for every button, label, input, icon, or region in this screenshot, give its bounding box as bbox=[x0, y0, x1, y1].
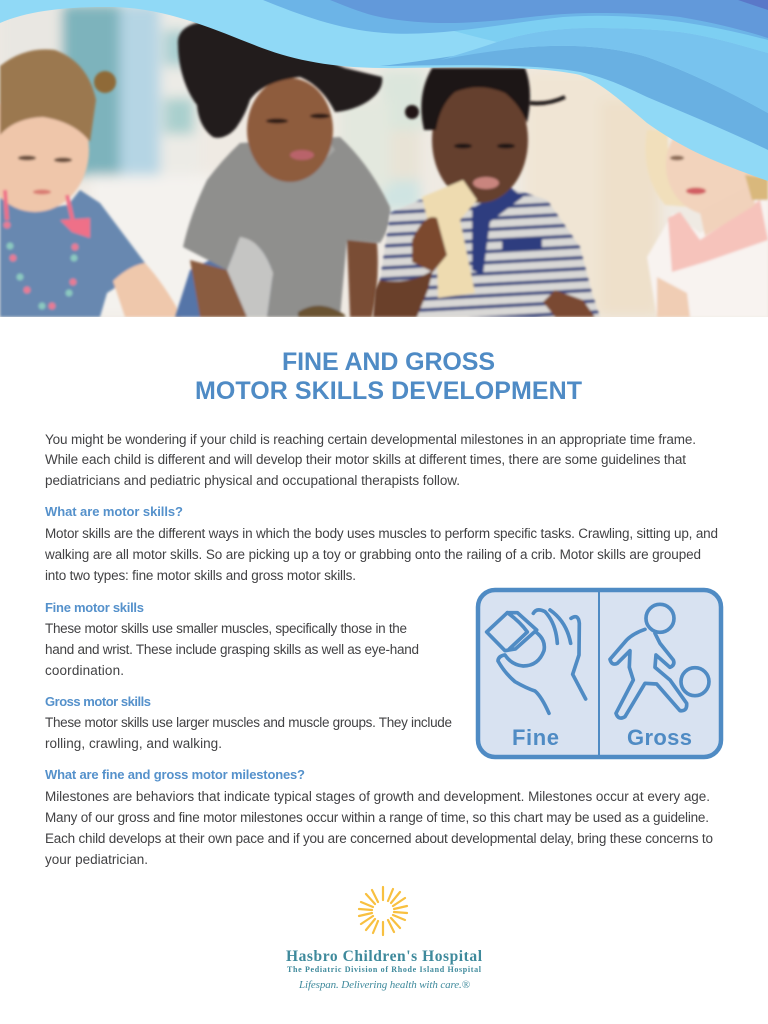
section: what are motor skills bbox=[44, 504, 718, 583]
wave banner bbox=[0, 0, 768, 181]
wave: sky blue band bbox=[440, 28, 768, 113]
wave: upper blue band bbox=[263, 0, 768, 40]
intro paragraph bbox=[45, 432, 696, 488]
intro paragraph: You might be wondering if your child is reaching certain developmental milestones in an appropriate time frame. bbox=[45, 432, 696, 447]
logo: Hasbro Children's Hospital bbox=[286, 887, 483, 991]
text: fine motor skills description: These motor skills use smaller muscles, specifically those in the bbox=[45, 621, 407, 636]
text: motor skills definition bbox=[44, 526, 718, 583]
text: milestones description: Each child develops at their own pace and if you are concerned about developmental delay, bring these concerns to bbox=[45, 831, 713, 846]
wave: pale streak bbox=[450, 13, 768, 53]
heading: gross motor skills: Gross motor skills bbox=[45, 694, 151, 709]
section: milestones bbox=[45, 767, 713, 867]
text: motor skills definition: Motor skills are the different ways in which the body uses muscles to perform specific tasks. Crawling, sitting up, and bbox=[45, 526, 718, 541]
wave: darkest corner bbox=[738, 0, 768, 10]
text: fine motor skills description bbox=[45, 621, 419, 678]
fine and gross icon panel bbox=[478, 590, 721, 757]
section: gross motor skills bbox=[45, 694, 452, 751]
text: hospital name: Hasbro Children's Hospital bbox=[286, 948, 483, 965]
wave: light base band bbox=[0, 0, 768, 181]
text: milestones description bbox=[45, 789, 713, 867]
text: milestones description: your pediatrician. bbox=[45, 852, 148, 867]
title: FINE AND GROSS bbox=[282, 348, 495, 376]
intro paragraph: pediatricians and pediatric physical and occupational therapists follow. bbox=[45, 473, 460, 488]
title bbox=[195, 348, 582, 405]
section: fine motor skills bbox=[45, 600, 419, 678]
heading: fine motor skills: Fine motor skills bbox=[45, 600, 144, 615]
icon: sun bbox=[359, 887, 407, 935]
text: tagline: Lifespan. Delivering health with care.® bbox=[298, 979, 471, 991]
heading: what are motor skills: What are motor skills? bbox=[45, 504, 183, 519]
text: gross motor skills description: rolling, crawling, and walking. bbox=[45, 736, 222, 751]
text: gross motor skills description bbox=[45, 715, 452, 751]
child 4 bbox=[645, 115, 768, 317]
intro paragraph: While each child is different and will develop their motor skills at different times, there are some guidelines that bbox=[45, 452, 686, 467]
text: division: The Pediatric Division of Rhode Island Hospital bbox=[287, 965, 482, 974]
text: gross motor skills description: These motor skills use larger muscles and muscle groups. They include bbox=[45, 715, 452, 730]
label: fine: Fine bbox=[512, 725, 559, 750]
child 1 bbox=[0, 49, 182, 317]
text: motor skills definition: into two types: fine motor skills and gross motor skills. bbox=[45, 568, 356, 583]
text: milestones description: Many of our gross and fine motor milestones occur within a range of time, so this chart may be used as a guideline. bbox=[45, 810, 709, 825]
wave: mid blue band bbox=[380, 46, 768, 150]
text: milestones description: Milestones are behaviors that indicate typical stages of growth and development. Milestones occur at every age. bbox=[45, 789, 710, 804]
title: MOTOR SKILLS DEVELOPMENT bbox=[195, 377, 582, 405]
heading: milestones: What are fine and gross motor milestones? bbox=[45, 767, 305, 782]
child 2 bbox=[175, 22, 390, 317]
label: gross: Gross bbox=[627, 725, 692, 750]
photo: children playing with wooden blocks bbox=[0, 0, 768, 317]
child 3 bbox=[373, 68, 600, 317]
icon: hand holding block bbox=[487, 610, 586, 713]
icon: child kicking a ball bbox=[610, 604, 709, 718]
text: fine motor skills description: hand and wrist. These include grasping skills as well as eye-hand bbox=[45, 642, 419, 657]
text: fine motor skills description: coordination. bbox=[45, 663, 124, 678]
wave: top blue band bbox=[330, 0, 768, 38]
text: motor skills definition: walking are all motor skills. So are picking up a toy or grabbing onto the railing of a crib. Motor skills are grouped bbox=[44, 547, 701, 562]
